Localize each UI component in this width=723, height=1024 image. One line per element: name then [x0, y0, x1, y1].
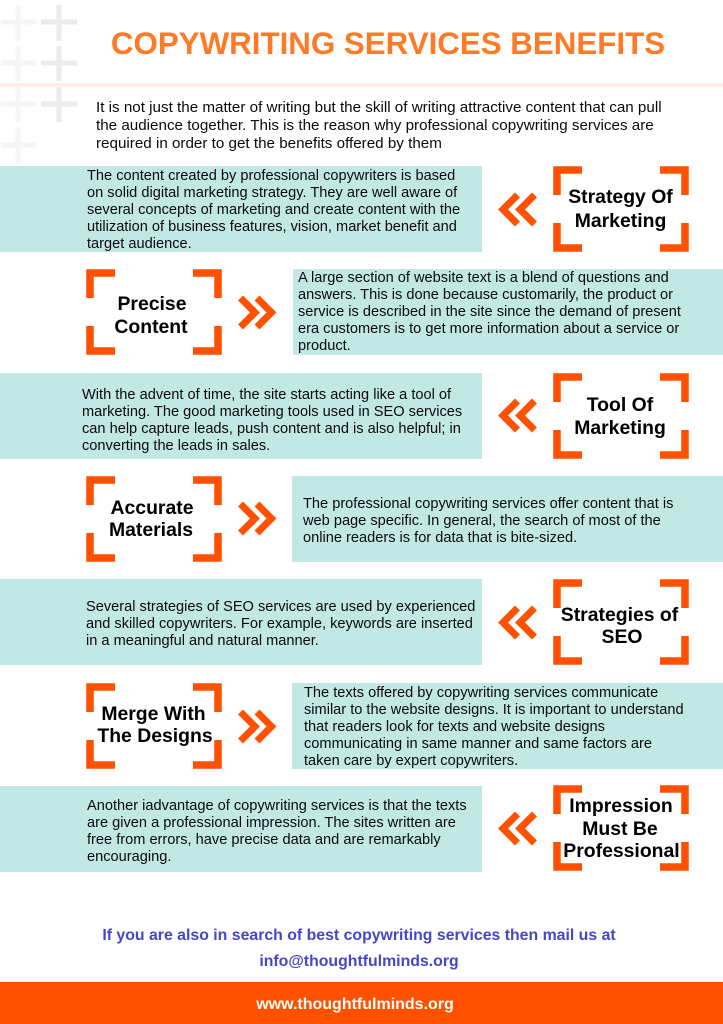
panel: tool of marketing — [0, 373, 685, 459]
intro text: required in order to get the benefits offered by them — [96, 135, 442, 152]
description: merge with the designs: that readers look for texts and website designs — [304, 719, 605, 735]
description: impression must be professional — [0, 786, 482, 872]
arrow: right chevrons — [240, 298, 272, 327]
description: tool of marketing — [0, 373, 482, 459]
heading: merge with the designs: Merge With — [101, 703, 206, 725]
description: precise content: answers. This is done because customarily, the product or — [298, 287, 673, 303]
arrow: right chevrons — [240, 504, 272, 533]
call to action — [102, 927, 616, 970]
arrow: left chevrons — [503, 195, 534, 224]
description: strategies of seo: Several strategies of SEO services are used by experienced — [86, 599, 475, 615]
heading: strategy of marketing: Marketing — [575, 210, 666, 232]
description: tool of marketing: converting the leads in sales. — [82, 438, 270, 454]
description: accurate materials: online readers is for data that is bite-sized. — [303, 530, 577, 546]
icon: bracket frame — [90, 273, 218, 351]
description: impression must be professional: free from errors, have precise data and are remarkably — [87, 832, 441, 848]
description: strategies of seo — [0, 579, 482, 665]
description: precise content: service is described in the site since the demand of present — [298, 304, 681, 320]
heading: strategies of seo: Strategies of — [561, 604, 679, 626]
description: strategies of seo: and skilled copywriters. For example, keywords are inserted — [86, 616, 473, 632]
heading: merge with the designs: The Designs — [97, 725, 213, 747]
panel: accurate materials — [90, 476, 723, 562]
description: impression must be professional: Another iadvantage of copywriting services is that the texts — [87, 798, 467, 814]
description: strategy of marketing: on solid digital marketing strategy. They are well aware of — [87, 185, 458, 201]
icon: bracket frame — [90, 480, 218, 558]
footer bar — [0, 982, 723, 1024]
heading: strategies of seo: SEO — [602, 626, 642, 648]
description: impression must be professional: encouraging. — [87, 849, 171, 865]
icon: bracket frame — [90, 687, 218, 765]
arrow: left chevrons — [503, 608, 534, 637]
heading: precise content: Precise — [117, 293, 187, 315]
heading: tool of marketing: Marketing — [574, 417, 666, 439]
description: merge with the designs: taken care by expert copywriters. — [304, 753, 518, 769]
heading: impression must be professional: Professional — [563, 840, 680, 862]
description: accurate materials — [292, 476, 723, 562]
description: tool of marketing: marketing. The good marketing tools used in SEO services — [82, 404, 462, 420]
description: strategy of marketing: several concepts of marketing and create content with the — [87, 202, 460, 218]
intro text — [96, 99, 662, 152]
heading: accurate materials: Materials — [109, 519, 193, 541]
description: strategy of marketing: The content created by professional copywriters is based — [87, 168, 455, 184]
heading: impression must be professional: Must Be — [582, 818, 658, 840]
panel: merge with the designs — [90, 683, 723, 769]
icon: bracket frame — [557, 170, 685, 248]
icon: bracket frame — [557, 583, 685, 661]
heading: strategy of marketing: Strategy Of — [568, 186, 673, 208]
arrow: left chevrons — [503, 401, 534, 430]
arrow: left chevrons — [503, 814, 534, 843]
description: precise content: product. — [298, 338, 351, 354]
description: merge with the designs — [292, 683, 723, 769]
description: tool of marketing: can help capture leads, push content and is also helpful; in — [82, 421, 461, 437]
description: accurate materials: The professional copywriting services offer content that is — [303, 496, 673, 512]
footer bar: www.thoughtfulminds.org — [255, 996, 454, 1013]
call to action: info@thoughtfulminds.org — [259, 953, 459, 970]
panel: impression must be professional — [0, 786, 685, 872]
description: impression must be professional: are given a professional impression. The sites written are — [87, 815, 456, 831]
description: precise content: era customers is to get more information about a service or — [298, 321, 679, 337]
intro text: the audience together. This is the reason why professional copywriting services are — [96, 117, 654, 134]
icon: bracket frame — [557, 377, 685, 455]
call to action: If you are also in search of best copywriting services then mail us at — [102, 927, 616, 944]
heading: precise content: Content — [114, 316, 188, 338]
description: merge with the designs: similar to the website designs. It is important to understand — [304, 702, 684, 718]
icon: bracket frame — [557, 789, 685, 867]
heading: accurate materials: Accurate — [110, 497, 194, 519]
title: COPYWRITING SERVICES BENEFITS — [111, 26, 665, 61]
panel: strategy of marketing — [0, 166, 685, 252]
panel: precise content — [90, 269, 723, 355]
description: tool of marketing: With the advent of time, the site starts acting like a tool of — [82, 387, 452, 403]
description: strategies of seo: in a meaningful and natural manner. — [86, 633, 319, 649]
description: precise content: A large section of website text is a blend of questions and — [298, 270, 669, 286]
description: strategy of marketing — [0, 166, 482, 252]
description: strategy of marketing: utilization of business features, vision, market benefit and — [87, 219, 457, 235]
description: merge with the designs: communicating in same manner and same factors are — [304, 736, 652, 752]
description: merge with the designs: The texts offered by copywriting services communicate — [304, 685, 658, 701]
intro text: It is not just the matter of writing but the skill of writing attractive content that can pull — [96, 99, 662, 116]
description: precise content — [293, 269, 723, 355]
description: accurate materials: web page specific. In general, the search of most of the — [302, 513, 661, 529]
panel: strategies of seo — [0, 579, 685, 665]
arrow: right chevrons — [240, 712, 272, 741]
heading: tool of marketing: Tool Of — [587, 394, 654, 416]
description: strategy of marketing: target audience. — [87, 236, 192, 252]
heading: impression must be professional: Impression — [569, 795, 673, 817]
